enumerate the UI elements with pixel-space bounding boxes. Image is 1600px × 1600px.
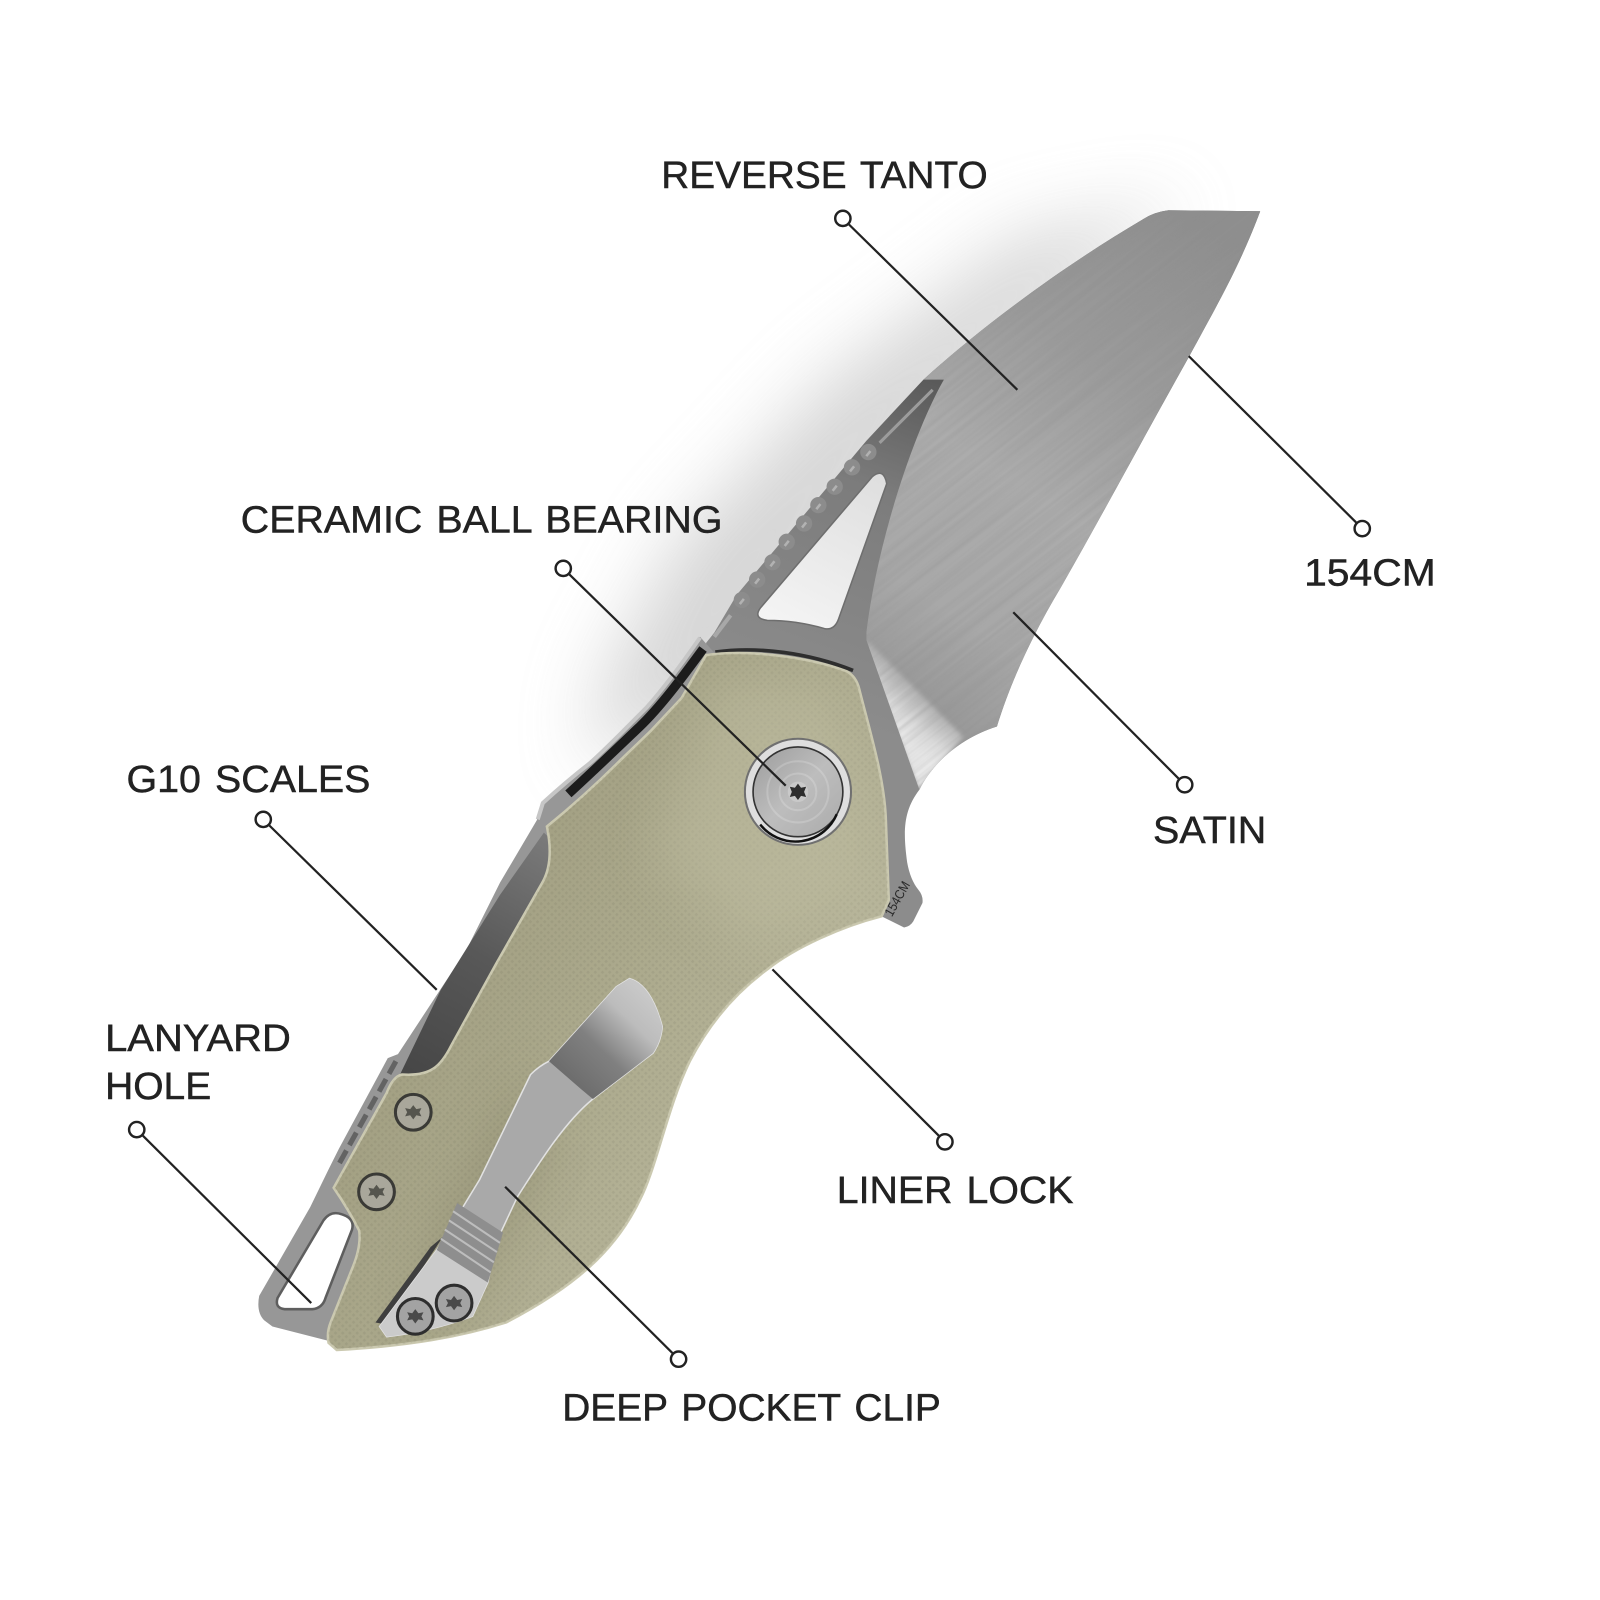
G10 handle scale [326, 652, 890, 1352]
callout: G10 scales [127, 758, 437, 990]
finger hole in blade [758, 473, 887, 629]
black gap under top of handle [568, 649, 703, 794]
pocket clip [376, 979, 662, 1337]
callout: ceramic ball bearing [241, 499, 786, 786]
clip base plate [380, 1250, 488, 1337]
dark shadow along handle top [715, 650, 853, 670]
callout: satin: SATIN [1153, 809, 1266, 852]
blade stamp: 154CM [881, 879, 913, 919]
pivot bearing [745, 739, 851, 845]
clip upper bend shading [549, 979, 662, 1099]
callout: ceramic ball bearing: CERAMIC BALL BEARING [241, 499, 722, 542]
knife illustration [144, 210, 1364, 1352]
callout: liner lock: LINER LOCK [837, 1169, 1074, 1212]
liner steel frame [258, 637, 717, 1341]
callout: deep pocket clip: DEEP POCKET CLIP [562, 1386, 941, 1429]
clip screw left [397, 1298, 433, 1334]
blade silhouette and tang [706, 210, 1260, 928]
lanyard hole [277, 1213, 353, 1309]
handle screw upper [395, 1094, 431, 1130]
callout: G10 scales: G10 SCALES [127, 758, 370, 801]
cast shadow behind blade [592, 204, 1184, 765]
light outer edge of liner [538, 638, 700, 819]
spine highlight [880, 390, 933, 443]
handle slot [400, 833, 574, 1074]
clip grooves [437, 1203, 503, 1283]
callout: satin [1013, 612, 1266, 852]
clip screw right [436, 1285, 472, 1321]
callout: reverse tanto [661, 154, 1017, 390]
callout: lanyard hole: LANYARD [105, 1017, 291, 1060]
backspacer detail marks [339, 1061, 396, 1164]
callout: 154CM [1189, 356, 1436, 595]
blade flat with satin finish [866, 210, 1260, 790]
callout: lanyard hole [105, 1017, 311, 1303]
callout: deep pocket clip [505, 1187, 941, 1429]
callout: reverse tanto: REVERSE TANTO [661, 154, 988, 197]
callout: liner lock [772, 969, 1074, 1212]
jimping teeth [714, 444, 877, 637]
callout: 154CM: 154CM [1304, 552, 1436, 595]
callout: lanyard hole: HOLE [105, 1065, 211, 1108]
handle screw lower [359, 1174, 394, 1210]
